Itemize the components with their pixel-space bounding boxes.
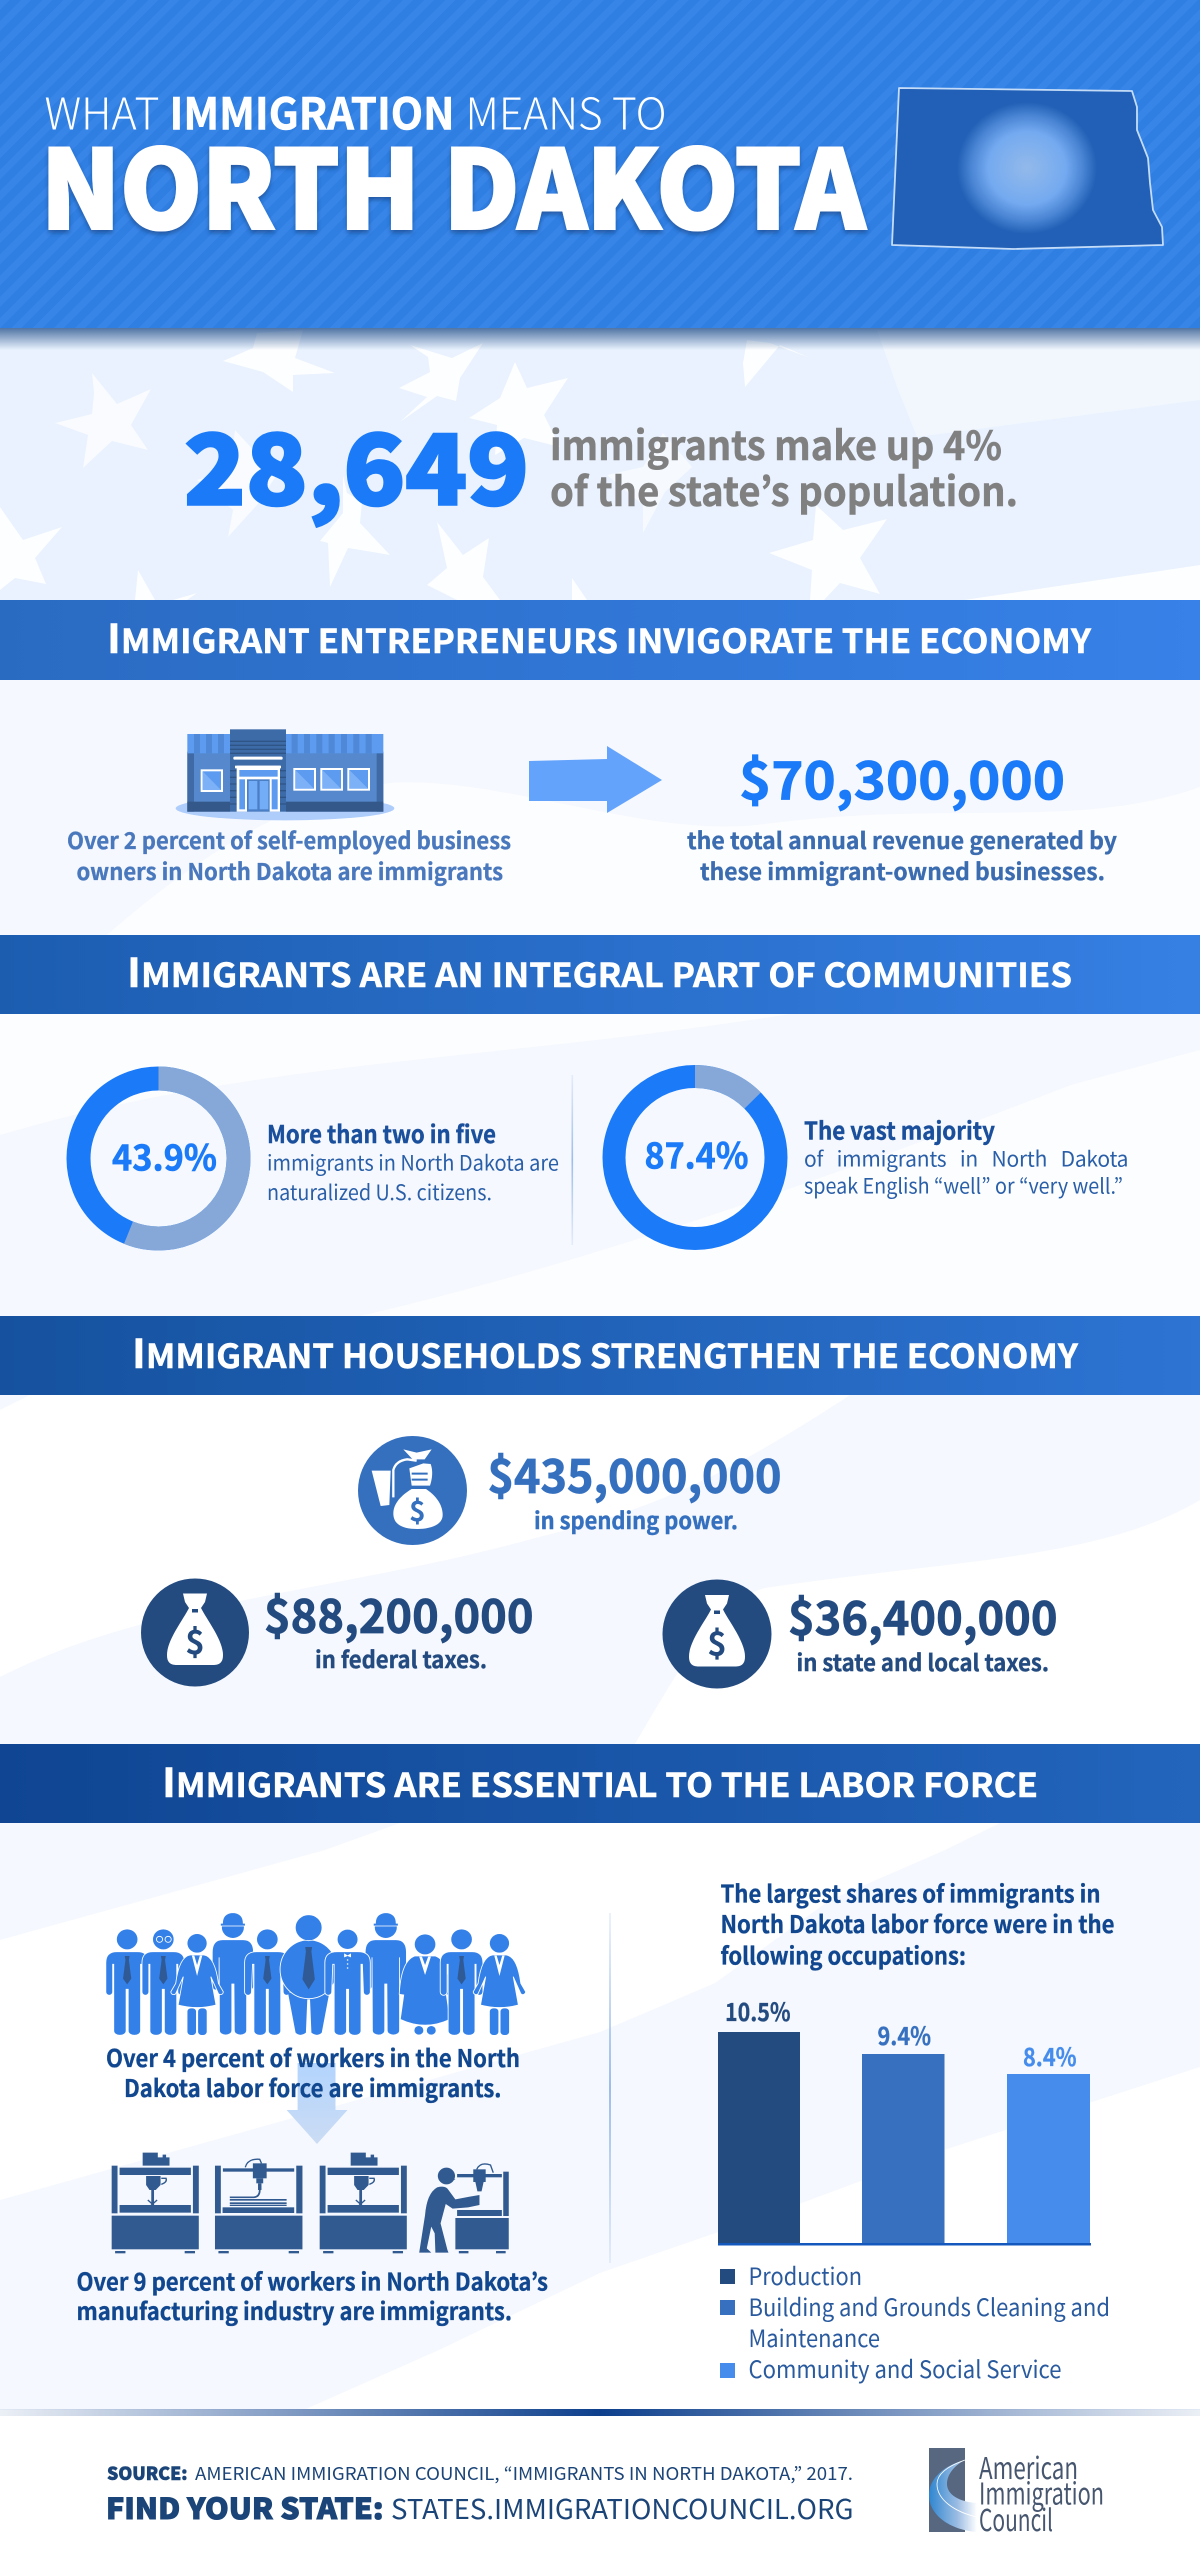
machine: laser cutter: [112, 2153, 199, 2253]
caption: revenue: [687, 822, 1117, 887]
icon: group of workers: [106, 1913, 526, 2035]
caption: manufacturing: Over 9 percent of workers in North Dakota’s: [76, 2262, 548, 2298]
bar chart: occupations: 8.4%: [1023, 2038, 1076, 2074]
heading: occupations: North Dakota labor force were in the: [720, 1905, 1114, 1940]
bar chart: occupations: 9.4%: [878, 2017, 931, 2053]
find your state line: [106, 2486, 854, 2528]
worker: large man: [280, 1915, 337, 2035]
section banner: entrepreneurs: [0, 600, 1200, 680]
find your state line: FIND YOUR STATE:: [106, 2486, 384, 2528]
donut chart: 43.9%: [78, 1078, 238, 1238]
text: naturalized citizens: immigrants in North Dakota are: [267, 1148, 559, 1178]
donut chart: 43.9%: 43.9%: [112, 1130, 217, 1182]
heading: occupations: The largest shares of immigrants in: [720, 1874, 1100, 1910]
section banner: entrepreneurs: IMMIGRANT ENTREPRENEURS INVIGORATE THE ECONOMY: [107, 607, 1092, 665]
caption: business owners: Over 2 percent of self-employed business: [67, 822, 511, 856]
icon: money bag state and local: $: [707, 1618, 727, 1666]
stat: state and local taxes: in state and local taxes.: [796, 1644, 1049, 1678]
icon: hand holding money bag: [358, 1436, 467, 1545]
icon: manufacturing machines: [112, 2153, 509, 2253]
machine: laser cutter: [320, 2153, 407, 2253]
stat: spending power: $435,000,000: [488, 1438, 782, 1507]
title line: what immigration means to: [44, 78, 666, 142]
caption: labor force: [106, 2039, 520, 2104]
stat: federal taxes: $88,200,000: [264, 1578, 534, 1647]
worker: man with tie: [440, 1929, 483, 2035]
caption: revenue: the total annual revenue generated by: [687, 822, 1117, 856]
section banner: communities: [0, 935, 1200, 1014]
divider: [609, 1913, 611, 2263]
caption: manufacturing: manufacturing industry are immigrants.: [76, 2292, 512, 2327]
donut chart: 87.4%: 87.4%: [644, 1128, 748, 1180]
text: english proficiency: [804, 1112, 1128, 1200]
worker: man with tie: [245, 1929, 290, 2035]
text: english proficiency: The vast majority: [804, 1112, 995, 1146]
title line: what immigration means to: IMMIGRATION: [170, 78, 454, 142]
caption: business owners: owners in North Dakota are immigrants: [76, 853, 503, 887]
machine: operator at workstation: [419, 2164, 509, 2253]
worker: hard hat left: [212, 1913, 254, 2035]
arrow: labor force to manufacturing: [287, 2063, 348, 2144]
legend: occupations: Maintenance: [748, 2319, 880, 2354]
worker: woman: [473, 1934, 526, 2035]
logo: american immigration council: Immigration: [979, 2470, 1104, 2514]
section banner: labor force: [0, 1744, 1200, 1823]
bar chart: occupations: [718, 1993, 1091, 2246]
machine: 3d printer: [215, 2159, 302, 2253]
section banner: households: [0, 1316, 1200, 1395]
caption: business owners: [67, 822, 511, 887]
source line: SOURCE:: [107, 2460, 188, 2486]
caption: labor force: Over 4 percent of workers in the North: [106, 2039, 520, 2074]
header banner: [0, 0, 1200, 328]
title line: what immigration means to: WHAT: [44, 78, 160, 142]
stat: federal taxes: in federal taxes.: [315, 1641, 487, 1675]
divider: [572, 1075, 573, 1245]
stat: revenue: $70,300,000: [739, 740, 1065, 816]
logo: american immigration council: American: [979, 2444, 1078, 2488]
caption: labor force: Dakota labor force are immigrants.: [124, 2069, 502, 2104]
worker: hard hat right: [365, 1913, 406, 2035]
icon: hand holding money bag: $: [409, 1490, 426, 1530]
source line: AMERICAN IMMIGRATION COUNCIL, “IMMIGRANTS IN NORTH DAKOTA,” 2017.: [195, 2460, 853, 2486]
stat: 28,649 immigrants: 28,649: [184, 392, 529, 532]
find your state line: STATES.IMMIGRATIONCOUNCIL.ORG: [391, 2488, 854, 2527]
worker: woman: [171, 1934, 223, 2035]
worker: large woman: [399, 1934, 451, 2035]
stat: spending power: in spending power.: [534, 1502, 738, 1536]
logo: american immigration council: [929, 2444, 1104, 2540]
heading: occupations: [720, 1874, 1114, 1972]
arrow: business owners to revenue: [529, 746, 662, 813]
stat: federal taxes: [264, 1578, 534, 1675]
icon: north dakota state map: [892, 88, 1163, 249]
text: naturalized citizens: naturalized U.S. citizens.: [267, 1177, 492, 1207]
legend: occupations: Building and Grounds Cleaning and: [748, 2288, 1110, 2323]
legend: occupations: Production: [748, 2257, 862, 2292]
stat: 28,649 immigrants: of the state’s population.: [550, 460, 1018, 518]
section banner: labor force: IMMIGRANTS ARE ESSENTIAL TO THE LABOR FORCE: [162, 1751, 1038, 1809]
section banner: households: IMMIGRANT HOUSEHOLDS STRENGTHEN THE ECONOMY: [132, 1322, 1079, 1380]
stat: 28,649 immigrants: immigrants make up 4%: [550, 414, 1002, 472]
text: english proficiency: speak English “well” or “very well.”: [804, 1170, 1123, 1200]
legend: occupations: Community and Social Service: [748, 2350, 1062, 2385]
title line: what immigration means to: MEANS TO: [466, 78, 666, 142]
donut chart: 87.4%: [614, 1076, 776, 1238]
text: english proficiency: of immigrants in North Dakota: [804, 1144, 1128, 1174]
stat: state and local taxes: $36,400,000: [788, 1580, 1058, 1649]
stat: spending power: [488, 1438, 782, 1536]
stat: state and local taxes: [788, 1580, 1058, 1678]
heading: occupations: following occupations:: [720, 1936, 966, 1972]
caption: revenue: these immigrant-owned businesses.: [700, 853, 1105, 887]
title: north dakota: NORTH DAKOTA: [41, 104, 867, 260]
section banner: communities: IMMIGRANTS ARE AN INTEGRAL PART OF COMMUNITIES: [127, 941, 1072, 999]
footer: [0, 2409, 1200, 2566]
worker: man with tie: [106, 1929, 149, 2035]
flag background with stars: [0, 328, 1200, 601]
icon: storefront: [176, 729, 394, 820]
header shadow: [0, 328, 1200, 350]
icon: money bag state and local: [662, 1580, 772, 1688]
caption: manufacturing: [76, 2262, 548, 2327]
text: naturalized citizens: More than two in five: [267, 1115, 496, 1150]
text: naturalized citizens: [267, 1115, 559, 1207]
page background: [0, 680, 1200, 2410]
worker: man with glasses: [142, 1929, 185, 2035]
worker: man with bow tie: [325, 1930, 370, 2035]
stat: 28,649 immigrants: [184, 392, 1018, 532]
icon: money bag federal: [141, 1578, 249, 1686]
icon: money bag federal: $: [185, 1616, 205, 1664]
logo: american immigration council: Council: [979, 2496, 1053, 2540]
bar chart: occupations: 10.5%: [725, 1993, 790, 2029]
legend: occupations: [720, 2257, 1110, 2385]
